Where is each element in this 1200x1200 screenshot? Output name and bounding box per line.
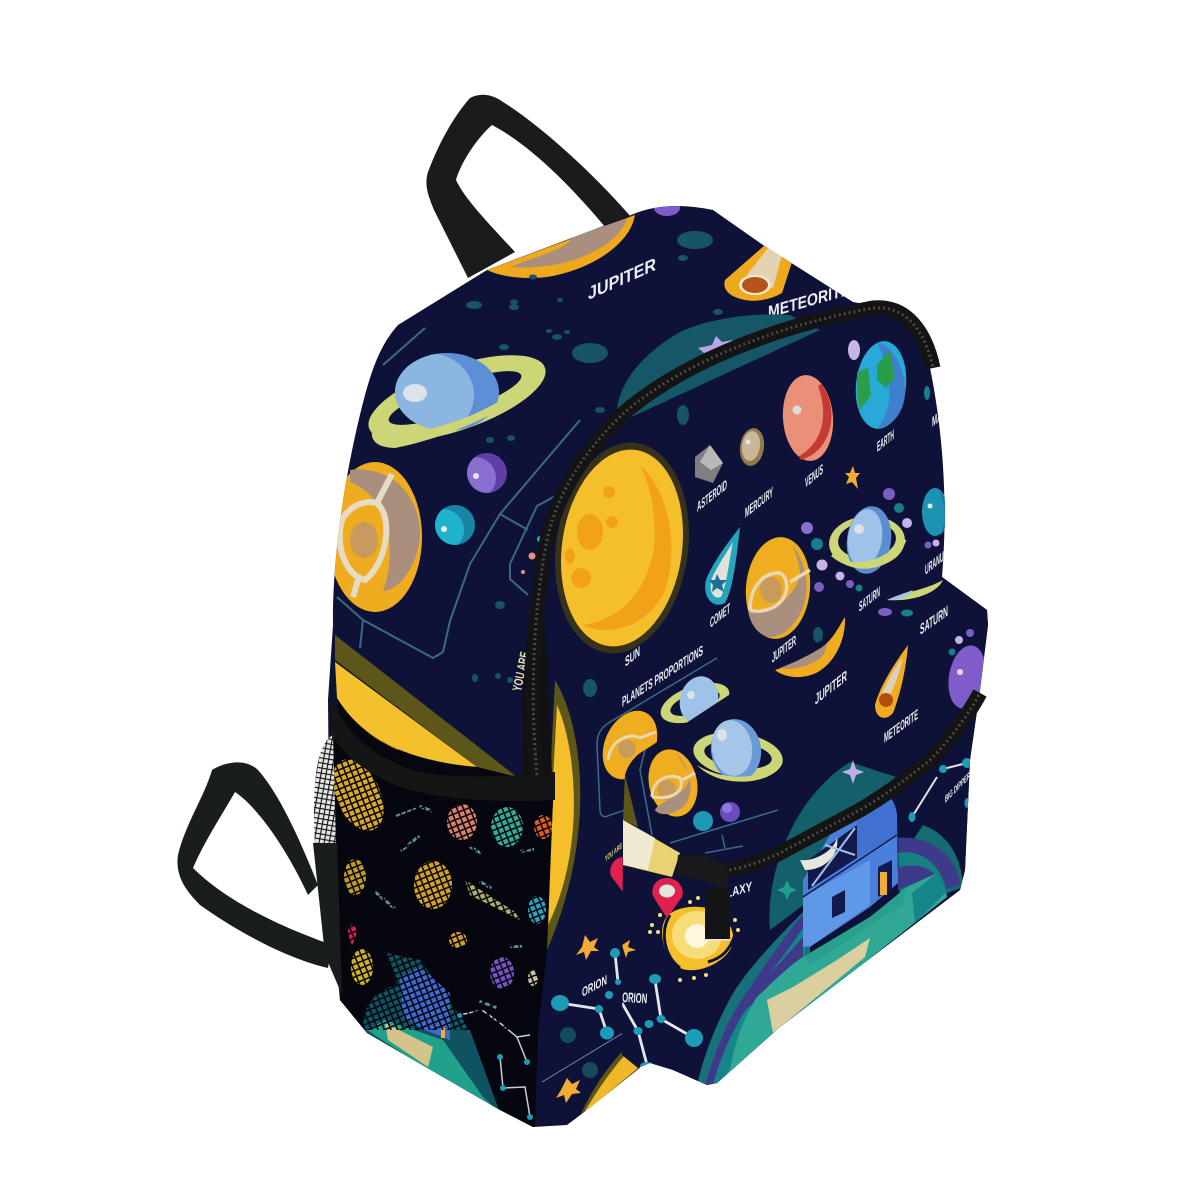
pocket Jupiter mini	[642, 745, 704, 821]
front panel prints: YOU ARE	[605, 841, 622, 864]
meshed constellation	[457, 1010, 533, 1120]
beige ground	[767, 938, 870, 1033]
rear loop strap	[177, 762, 332, 968]
pocket Saturn	[690, 716, 786, 784]
Comet	[705, 527, 740, 605]
proportions chart frame	[597, 658, 717, 817]
mesh side pocket	[322, 730, 560, 1127]
front pocket: METEORITE	[884, 707, 918, 747]
star field dots	[466, 231, 723, 683]
yellow crescent lower left	[547, 680, 580, 950]
backpack illustration: MARS	[932, 401, 950, 431]
pocket zipper	[680, 693, 980, 870]
Jupiter mini	[592, 702, 668, 788]
Saturn on side panel	[368, 353, 546, 448]
elastic band	[330, 690, 555, 801]
lower divider line	[542, 1033, 623, 1082]
moons	[583, 386, 940, 697]
zipper pull	[676, 855, 730, 940]
Big Dipper constellation	[908, 758, 972, 822]
front panel prints: SATURN	[859, 584, 880, 616]
front panel prints: JUPITER	[772, 633, 796, 667]
label: Meteorite: METEORITE	[768, 279, 850, 322]
front pocket	[622, 577, 990, 1085]
label: Jupiter: JUPITER	[588, 253, 656, 304]
Jupiter on side panel	[328, 462, 422, 612]
front panel prints: EARTH	[877, 427, 894, 456]
front panel prints	[542, 339, 950, 1116]
lilac star	[698, 336, 733, 353]
side panel prints	[328, 328, 580, 785]
building	[803, 795, 898, 947]
front panel prints: COMET	[710, 601, 730, 632]
left rings	[697, 905, 810, 1085]
front Orion constellation	[622, 974, 703, 1070]
backpack body	[328, 206, 988, 1127]
top panel prints	[466, 200, 850, 683]
pocket moons near Saturn slice	[878, 608, 913, 616]
label: Sun: SUN	[625, 644, 640, 671]
dark teal blotches	[560, 1027, 598, 1078]
pocket Saturn slice	[887, 580, 943, 600]
lilac moon near Earth	[848, 340, 860, 360]
meshed observatory	[363, 953, 500, 1113]
teal observatory arc	[617, 314, 820, 420]
Earth	[856, 341, 906, 429]
Orion constellation back	[551, 948, 621, 1040]
right rings	[900, 825, 963, 900]
label: Galaxy: GALAXY	[712, 879, 752, 905]
label: You are here: YOU ARE	[509, 650, 532, 693]
front panel prints: PLANETS PROPORTIONS	[622, 643, 703, 711]
meteorite on top panel	[724, 245, 792, 301]
top carry handle	[426, 95, 632, 278]
large yellow planet	[335, 635, 517, 785]
pocket label: Jupiter: JUPITER	[815, 666, 847, 709]
yellow crescent bottom	[580, 1052, 640, 1116]
strap side	[313, 843, 342, 995]
Jupiter slice on top panel	[487, 215, 635, 278]
Saturn	[829, 506, 906, 574]
Jupiter	[746, 537, 811, 639]
pocket Meteorite	[875, 645, 908, 718]
Asteroid	[695, 445, 723, 483]
meshed labels	[373, 805, 534, 1009]
map pin	[652, 878, 683, 918]
pocket purple planet	[944, 629, 990, 712]
dark teal sky dome	[769, 762, 905, 930]
front panel prints: ASTEROID	[697, 477, 727, 516]
main zipper	[522, 308, 933, 775]
front pocket: BIG DIPPER	[945, 769, 970, 805]
pocket cream corner	[623, 775, 680, 877]
purple planet at top	[654, 206, 680, 216]
front panel prints: VENUS	[805, 461, 823, 491]
Mercury	[740, 428, 764, 466]
purple and teal moons	[435, 453, 507, 545]
pin behind pocket	[610, 857, 623, 892]
Uranus	[922, 488, 945, 536]
gold stars lower	[556, 935, 599, 1103]
meshed planets	[322, 751, 552, 989]
Sun	[555, 442, 689, 654]
front pocket: SATURN	[920, 602, 948, 639]
teal star	[777, 880, 797, 900]
bright hill	[717, 873, 947, 1085]
pocket moons	[693, 802, 740, 831]
small chart dots	[521, 536, 540, 574]
Venus	[782, 375, 834, 461]
observatory	[697, 760, 963, 1085]
backpack illustration: URANUS	[925, 546, 947, 579]
chart lines	[337, 328, 580, 658]
pocket Jupiter slice	[775, 617, 845, 677]
galaxy	[648, 896, 740, 982]
mesh edge bundle	[314, 735, 336, 845]
backpack illustration	[177, 94, 988, 1127]
front panel prints: MERCURY	[745, 485, 773, 522]
gold star	[845, 466, 860, 489]
gold star partial	[622, 940, 636, 958]
label: Orion back: ORION	[582, 972, 607, 1000]
hill overlap on building	[803, 890, 905, 965]
lilac star	[842, 760, 864, 784]
label: Orion front: ORION	[622, 989, 648, 1006]
Saturn mini	[655, 672, 735, 731]
chart lines	[640, 750, 778, 853]
